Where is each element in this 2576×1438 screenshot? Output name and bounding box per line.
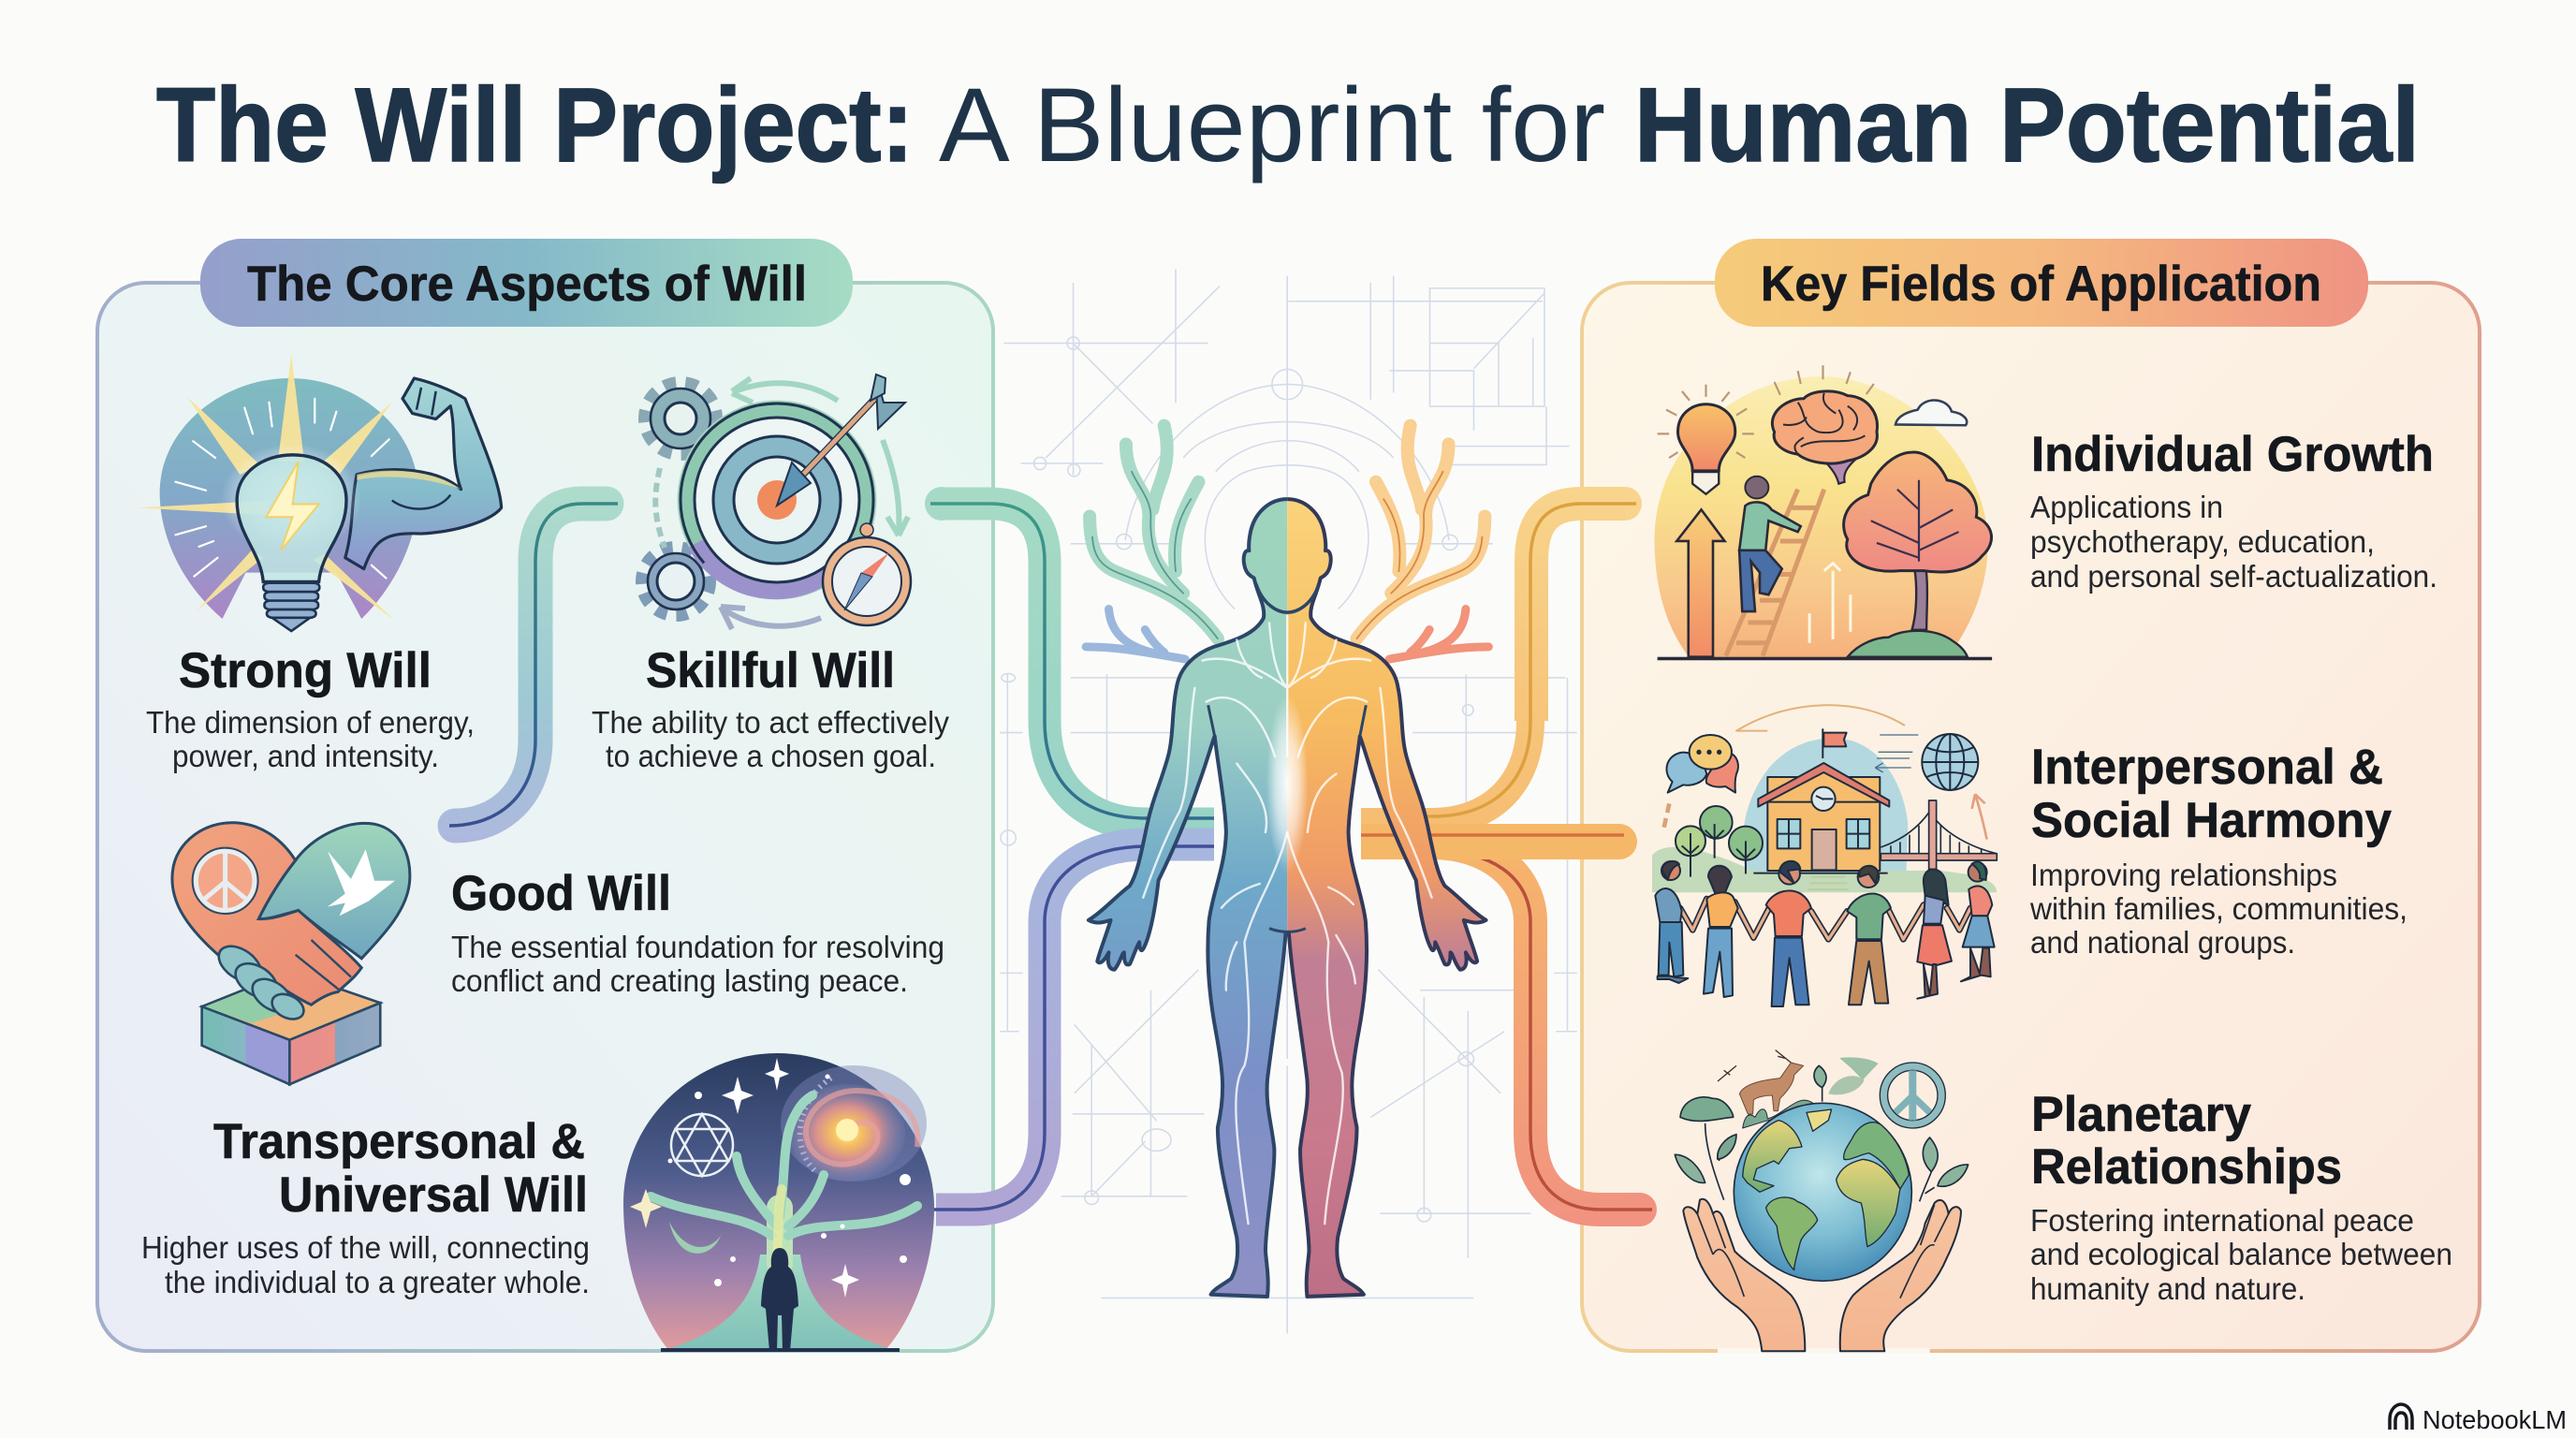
good will text: conflict and creating lasting peace. [451,963,908,998]
strong will text: The dimension of energy, [146,705,475,740]
growth arrow [1676,509,1724,657]
transpersonal text: Higher uses of the will, connecting [141,1230,590,1265]
lightning spikes [138,354,395,621]
transpersonal text [141,1114,590,1299]
pill heading: the core aspects of will [200,239,853,327]
title: A Blueprint for [939,66,1605,183]
strong will text [146,643,475,773]
title: Human Potential [1634,66,2420,183]
ladder [1726,490,1824,656]
skillful will text: to achieve a chosen goal. [606,739,936,773]
lower gear [642,548,710,615]
finger creases [1697,1205,1949,1299]
planetary text [2030,1087,2452,1306]
individual growth text: psychotherapy, education, [2030,524,2375,559]
right hand [1840,1200,1961,1351]
panel: the core aspects of will [97,283,993,1351]
chest and armpit lines [1208,705,1366,932]
human figure [1089,499,1486,1297]
south america [1766,1197,1818,1270]
chin line [1256,583,1319,612]
connector: strong will to good will [449,504,618,826]
notebooklm logo [2390,1404,2412,1430]
icon: strong will bulb and arm [138,354,502,631]
skillful will text: The ability to act effectively [592,705,949,740]
gap in panel border [1718,1348,1930,1354]
target rings [678,401,876,599]
sky dome [1743,739,1908,871]
transpersonal text: Transpersonal & [213,1114,585,1169]
gripping fingers [210,942,310,1022]
icon: planetary globe in hands [1675,1050,1969,1354]
ground [1658,657,1992,660]
individual growth text: Applications in [2030,490,2223,524]
light bulb [1658,385,1754,494]
tree [1844,452,1992,630]
branches from the figure [1086,426,1488,659]
individual growth text: and personal self-actualization. [2030,559,2437,594]
antlers [1718,1050,1791,1081]
planetary text: Fostering international peace [2030,1203,2414,1238]
panel: key fields of application [1582,283,2480,1351]
icon: interpersonal community scene [1652,705,1997,1006]
africa and europe [1837,1159,1900,1247]
connector: transpersonal will to figure [922,844,1214,1210]
right half of the body [1287,499,1486,1297]
cloud [1895,401,1967,425]
peace sign [1880,1063,1945,1128]
pill heading: key fields of application: Key Fields of Application [1761,257,2321,312]
interpersonal text: Social Harmony [2031,793,2392,848]
arrow [777,374,905,506]
good will text: The essential foundation for resolving [451,930,944,964]
good will text: Good Will [451,866,671,921]
icon: individual growth [1655,365,1992,660]
bulb base [263,583,319,631]
transpersonal text: Universal Will [279,1167,588,1223]
title [156,66,2420,183]
skillful will text: Skillful Will [646,643,895,698]
peace symbol [193,848,258,914]
globe [1922,734,1978,790]
trees [1676,806,1763,877]
interpersonal text [2029,740,2408,960]
speech bubbles [1666,735,1738,793]
planetary text: Relationships [2031,1139,2342,1195]
white ticks [176,399,389,579]
moon arc [669,1222,721,1254]
person six [1961,861,1995,981]
person three [1766,861,1811,1006]
interpersonal text: within families, communities, [2029,891,2408,926]
arc arrows [1663,705,1987,840]
climber [1739,477,1801,611]
icon: good will heart and handshake [172,823,410,1084]
hill [1848,631,1968,657]
strong will text: power, and intensity. [172,739,439,773]
stars [630,1058,911,1298]
good will text [451,866,944,998]
connector: figure to individual growth [1361,487,1642,822]
house [1753,728,1889,889]
person two [1704,866,1738,997]
bulb [237,455,346,581]
sacred geometry [671,1114,733,1176]
pill heading: key fields of application [1715,239,2368,327]
earth [1734,1103,1911,1281]
person five [1917,869,1952,999]
connector: figure to planetary relationships [1361,843,1657,1226]
title: The Will Project: [156,66,914,183]
energy veins [1143,616,1432,1224]
background blueprint lines behind the figure [1000,269,1577,1334]
transpersonal text: the individual to a greater whole. [165,1265,590,1299]
skillful will text [592,643,949,773]
connector: figure to interpersonal harmony [1361,824,1637,859]
interpersonal text: Improving relationships [2030,858,2337,892]
heart left and hand [172,823,361,1005]
individual growth text: Individual Growth [2031,427,2434,482]
tree base flare [661,1255,898,1351]
notebooklm badge: NotebookLM [2422,1405,2567,1434]
small light arrows [1809,564,1851,643]
tree trunk [767,1208,793,1264]
block [202,972,380,1040]
cycle arrows [655,378,908,629]
landscape [1652,847,1997,892]
radiating half disc [160,378,418,619]
planetary text: humanity and nature. [2030,1271,2305,1306]
upper gear [645,383,716,454]
silhouette [761,1248,798,1351]
brain [1772,365,1877,484]
right branches [1357,426,1488,659]
person four [1847,866,1891,1005]
strong will text: Strong Will [179,643,432,698]
interpersonal text: Interpersonal & [2031,740,2383,795]
left half of the body [1089,499,1287,1297]
foliage at globe top [1743,1100,1813,1128]
pill heading: the core aspects of will: The Core Aspects of Will [247,257,807,312]
interpersonal text: and national groups. [2030,925,2295,960]
icon: skillful will target [642,374,911,629]
tree and sprigs [1675,1057,1969,1201]
heart right [258,823,410,959]
glowing tree [651,1095,917,1351]
bolt [266,462,319,550]
flexed arm [345,378,502,569]
left branches [1086,426,1218,659]
deer [1739,1063,1804,1114]
central glow [1266,695,1309,873]
night sky disc [623,1053,934,1351]
planetary text: Planetary [2031,1087,2252,1142]
north america [1743,1121,1802,1192]
icon: cosmic tree and galaxy [623,1053,934,1352]
left hand [1683,1199,1805,1351]
person one [1655,861,1688,983]
tree limbs [651,1095,917,1236]
dove [328,849,395,916]
bridge [1881,800,1997,869]
people holding hands [1655,861,1995,1006]
galaxy [781,1065,927,1181]
glow [221,443,361,554]
ground line [661,1348,900,1352]
linked arms [1680,899,1970,939]
planetary text: and ecological balance between [2030,1237,2452,1271]
connector: skillful will to figure [925,487,1214,824]
sun egg [1655,376,1988,658]
compass [823,523,911,625]
individual growth text [2030,427,2437,594]
